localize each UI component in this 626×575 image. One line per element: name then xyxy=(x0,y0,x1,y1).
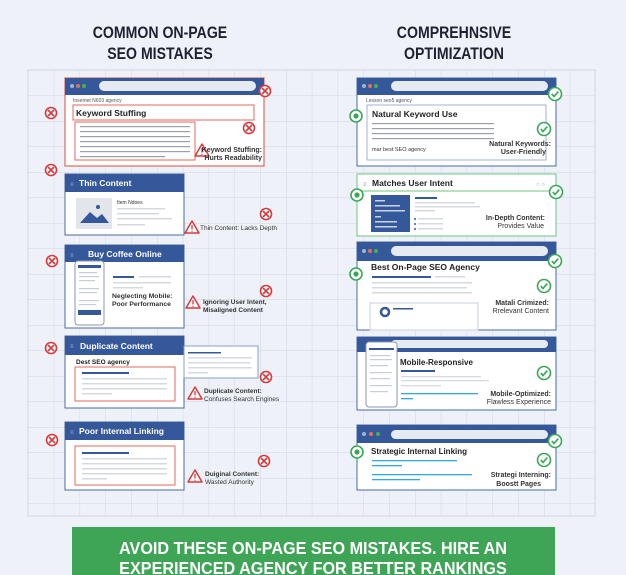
panel: best on-page seo agency: Best On-Page SEO Agency xyxy=(371,262,480,272)
panel: poor internal linking xyxy=(65,422,184,490)
icons: red x marks xyxy=(46,86,272,466)
panel: duplicate content: Duplicate Content xyxy=(80,341,153,351)
panel: natural keyword use: mar best SEO agency xyxy=(372,147,426,153)
panel: natural keyword use: Natural Keyword Use xyxy=(372,109,458,119)
panel: mobile-responsive: Mobile-Responsive xyxy=(400,358,473,367)
panel: duplicate copy xyxy=(184,346,258,378)
panel: keyword stuffing: Hurts Readability xyxy=(204,155,262,162)
panel: strategic internal linking: Strategic Internal Linking xyxy=(371,447,467,456)
panel: natural keyword use: Natural Keywords: xyxy=(489,141,551,148)
panel: buy coffee online: ≡ xyxy=(70,253,74,259)
callout: duplicate content: Duplicate Content: xyxy=(204,388,262,395)
title: left xyxy=(93,24,227,63)
panel: duplicate content: Dest SEO agency xyxy=(76,359,130,366)
callout: ignoring user intent: Misaligned Content xyxy=(203,307,264,314)
callout: ignoring user intent xyxy=(186,296,267,314)
panel: keyword stuffing: Keyword Stuffing: xyxy=(202,147,262,154)
panel: best on-page seo agency: Rrelevant Content xyxy=(493,308,549,315)
panel: matches user intent: In-Depth Content: xyxy=(486,215,545,222)
panel: duplicate content xyxy=(65,336,184,408)
panel: strategic internal linking: Boostt Pages xyxy=(496,481,541,488)
callout: duplicate content: Confuses Search Engines xyxy=(204,396,280,403)
panel: natural keyword use: Lesson seo5 agency xyxy=(366,98,412,104)
panel: buy coffee online: Neglecting Mobile: xyxy=(112,293,172,300)
panel: mobile-responsive: Mobile-Optimized: xyxy=(490,391,551,398)
callout: thin content xyxy=(185,221,277,233)
title: left: SEO MISTAKES xyxy=(107,45,213,63)
panel: matches user intent: ≡ xyxy=(363,182,367,188)
title: right: OPTIMIZATION xyxy=(404,45,504,63)
panel: strategic internal linking: Strategi Interning: xyxy=(491,472,551,479)
panel: mobile-responsive: Flawless Experience xyxy=(487,399,551,406)
panel: matches user intent: Provides Value xyxy=(497,223,544,230)
panel: buy coffee online xyxy=(65,245,184,328)
panel: buy coffee online: Buy Coffee Online xyxy=(88,249,162,259)
panel: duplicate content: ≡ xyxy=(70,344,74,350)
panel: thin content: Item Ndoes xyxy=(117,200,143,206)
panel: best on-page seo agency xyxy=(357,242,556,330)
panel: keyword stuffing: Insemet N603 agency xyxy=(73,98,122,104)
icons: green checks xyxy=(350,88,562,466)
panel: natural keyword use: User-Friendly xyxy=(501,149,546,156)
callout: thin content: Thin Content: Lacks Depth xyxy=(200,225,277,232)
banner: call to action: AVOID THESE ON-PAGE SEO MISTAKES. HIRE AN xyxy=(119,538,507,558)
panel: best on-page seo agency: Matali Crimized: xyxy=(495,300,549,307)
panel: buy coffee online: Poor Performance xyxy=(112,301,171,308)
callout: wasted authority: Wasted Authority xyxy=(205,479,255,486)
panel: strategic internal linking xyxy=(357,425,556,490)
banner: call to action xyxy=(72,527,555,575)
panel: matches user intent: Matches User Intent xyxy=(372,178,453,188)
panel: poor internal linking: ≡ xyxy=(70,430,74,436)
panel: matches user intent xyxy=(357,174,556,236)
callout: duplicate content xyxy=(188,387,280,403)
callout: wasted authority: Duiginal Content: xyxy=(205,471,259,478)
title: right: COMPREHNSIVE xyxy=(397,24,511,42)
panel: natural keyword use xyxy=(357,78,556,166)
panel: keyword stuffing: Keyword Stuffing xyxy=(76,108,146,118)
title: left: COMMON ON-PAGE xyxy=(93,24,227,42)
panel: matches user intent: ○ ○ xyxy=(536,182,545,188)
panel: thin content: ≡ xyxy=(70,182,74,188)
panel: mobile-responsive xyxy=(357,337,556,410)
panel: poor internal linking: Poor Internal Linking xyxy=(79,426,164,436)
callout: wasted authority xyxy=(188,470,259,486)
callout: ignoring user intent: Ignoring User Intent, xyxy=(203,299,267,306)
panel: keyword stuffing xyxy=(65,78,264,166)
title: right xyxy=(397,24,511,63)
panel: thin content xyxy=(65,174,184,235)
panel: thin content: Thin Content xyxy=(79,178,132,188)
